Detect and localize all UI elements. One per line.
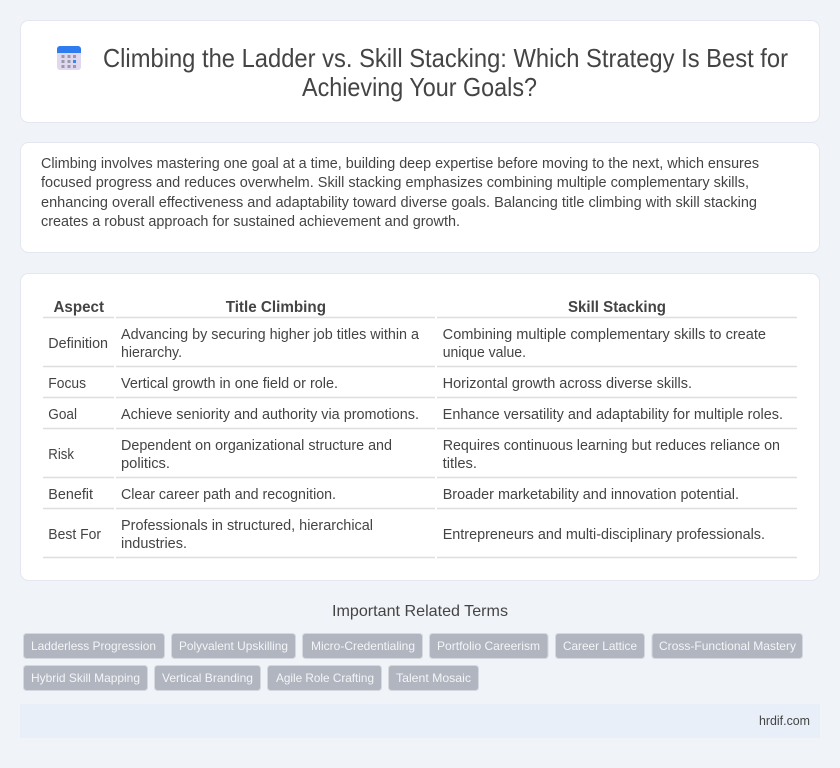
tags: related terms: Hybrid Skill Mapping <box>31 671 140 685</box>
table header: Title Climbing <box>226 299 326 316</box>
table row: definition <box>48 327 766 361</box>
tags: related terms: Cross-Functional Mastery <box>659 639 796 653</box>
table row: risk: Dependent on organizational structure and <box>121 438 392 454</box>
tags: related terms <box>24 634 802 690</box>
tags: related terms: Career Lattice <box>563 639 637 653</box>
table row: goal <box>48 407 783 423</box>
table row: best for: Entrepreneurs and multi-disciplinary professionals. <box>443 527 765 543</box>
heading: related terms: Important Related Terms <box>332 603 508 620</box>
table row: definition: hierarchy. <box>121 345 182 361</box>
title: Achieving Your Goals? <box>302 74 537 102</box>
table row: risk: politics. <box>121 456 170 472</box>
table row: focus <box>48 376 692 392</box>
table row: risk: Requires continuous learning but reduces reliance on <box>443 438 780 454</box>
tags: related terms: Talent Mosaic <box>396 671 471 685</box>
tags: related terms: Agile Role Crafting <box>276 671 374 685</box>
table row: focus: Vertical growth in one field or role. <box>121 376 338 392</box>
title <box>103 45 788 102</box>
text block: introduction <box>41 156 759 230</box>
table row: benefit <box>48 487 739 503</box>
table row: definition: Advancing by securing higher job titles within a <box>121 327 419 343</box>
table header <box>54 299 666 316</box>
icon: calendar <box>57 46 81 70</box>
table row: benefit: Clear career path and recognition. <box>121 487 336 503</box>
footer: hrdif.com <box>759 713 810 728</box>
tags: related terms: Portfolio Careerism <box>437 639 540 653</box>
table row: definition: Definition <box>48 336 108 352</box>
table header: Aspect <box>54 299 105 316</box>
table row: focus: Horizontal growth across diverse skills. <box>443 376 692 392</box>
table row: definition: unique value. <box>443 345 526 361</box>
tags: related terms: Polyvalent Upskilling <box>179 639 288 653</box>
table row: best for: Best For <box>48 527 101 543</box>
tags: related terms: Vertical Branding <box>162 671 253 685</box>
table row: best for: Professionals in structured, hierarchical <box>121 518 373 534</box>
text block: introduction: enhancing overall effectiveness and adaptability toward diverse goals. Balancing title climbing with skill stacking <box>41 195 757 211</box>
panel: introduction <box>20 142 820 252</box>
table row: goal: Goal <box>48 407 77 423</box>
tags: related terms: Ladderless Progression <box>31 639 156 653</box>
footer <box>20 704 820 738</box>
title: Climbing the Ladder vs. Skill Stacking: Which Strategy Is Best for <box>103 45 788 73</box>
panel: comparison table <box>20 274 820 580</box>
table row: risk <box>48 438 780 472</box>
text block: introduction: creates a robust approach for sustained achievement and growth. <box>41 214 460 230</box>
table row: best for <box>48 518 765 552</box>
panel: title card <box>20 20 820 122</box>
table row: goal: Achieve seniority and authority via promotions. <box>121 407 419 423</box>
table row: definition: Combining multiple complementary skills to create <box>443 327 766 343</box>
table row: best for: industries. <box>121 536 187 552</box>
table row: goal: Enhance versatility and adaptability for multiple roles. <box>443 407 783 423</box>
text block: introduction: focused progress and reduces overwhelm. Skill stacking emphasizes combining multiple complementary skills, <box>41 175 749 191</box>
table row: focus: Focus <box>48 376 86 392</box>
text block: introduction: Climbing involves mastering one goal at a time, building deep expertise before moving to the next, which ensures <box>41 156 759 172</box>
table row: benefit: Broader marketability and innovation potential. <box>443 487 739 503</box>
table row: benefit: Benefit <box>48 487 93 503</box>
tags: related terms: Micro-Credentialing <box>311 639 415 653</box>
table row: risk: titles. <box>443 456 477 472</box>
table row: risk: Risk <box>48 447 75 463</box>
table header: Skill Stacking <box>568 299 666 316</box>
